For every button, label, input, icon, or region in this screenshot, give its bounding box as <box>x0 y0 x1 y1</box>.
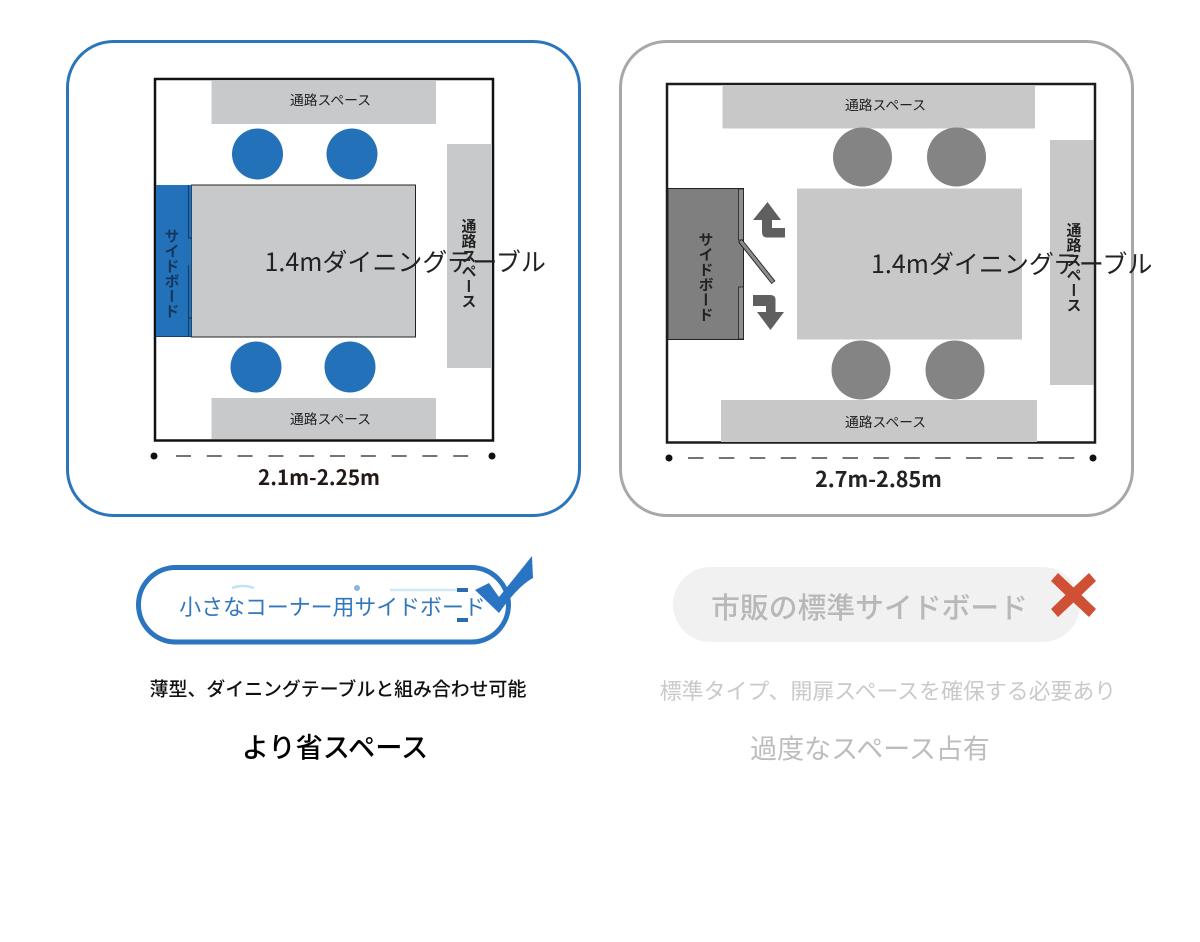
walkway: right: 通路スペース <box>1064 222 1084 313</box>
text: standard description: 標準タイプ、開扉スペースを確保する必要あり <box>660 675 1116 706</box>
width dimension: 2.1m-2.25m <box>258 461 380 491</box>
icon: door swing arrow down <box>753 295 784 330</box>
standard sideboard with open door: サイドボード <box>696 232 716 322</box>
walkway: top <box>722 85 1035 128</box>
room outline <box>155 79 493 440</box>
panel: compact layout <box>68 42 580 516</box>
chairs <box>832 128 986 400</box>
corner sideboard: サイドボード <box>162 228 182 318</box>
icon: check mark <box>475 556 533 613</box>
width dimension <box>666 454 1096 494</box>
text: compact result: より省スペース <box>242 725 428 765</box>
walkway: bottom: 通路スペース <box>290 408 371 428</box>
room outline <box>667 84 1095 442</box>
badge: standard sideboard: 市販の標準サイドボード <box>711 586 1028 627</box>
text: standard result: 過度なスペース占有 <box>750 728 990 766</box>
walkway: right <box>447 144 492 368</box>
table label: 1.4mダイニングテーブル <box>264 243 546 279</box>
chairs <box>230 128 378 392</box>
dining table <box>797 188 1022 340</box>
walkway: bottom <box>212 398 436 439</box>
table label: 1.4mダイニングテーブル <box>871 245 1152 281</box>
walkway: top: 通路スペース <box>845 94 926 114</box>
standard sideboard with open door <box>668 188 774 340</box>
walkway: top <box>212 81 436 124</box>
badge: standard sideboard <box>673 567 1096 642</box>
width dimension: 2.7m-2.85m <box>815 463 942 494</box>
width dimension <box>150 452 496 491</box>
badge: corner sideboard <box>138 556 533 642</box>
dining table <box>192 185 416 337</box>
icon: door swing arrow up <box>753 202 785 238</box>
badge: corner sideboard: 小さなコーナー用サイドボード <box>179 591 486 622</box>
text: compact description: 薄型、ダイニングテーブルと組み合わせ可能 <box>150 674 526 702</box>
panel: standard layout <box>620 42 1152 516</box>
corner sideboard <box>156 185 192 336</box>
icon: cross mark <box>1051 573 1096 617</box>
walkway: right <box>1050 140 1094 385</box>
walkway: bottom <box>721 400 1037 442</box>
walkway: bottom: 通路スペース <box>845 411 926 431</box>
walkway: top: 通路スペース <box>290 89 371 109</box>
walkway: right: 通路スペース <box>458 218 480 309</box>
